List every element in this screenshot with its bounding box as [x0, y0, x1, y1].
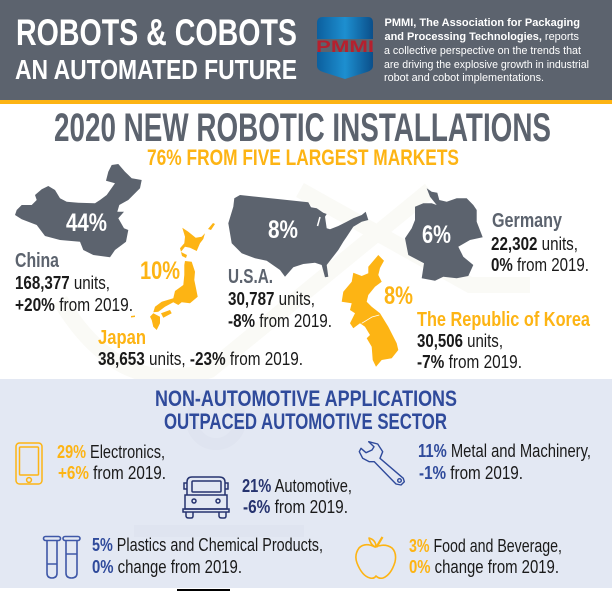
panel: Germany: Germany [492, 210, 563, 232]
automotive: 21% Automotive, [242, 476, 352, 496]
panel: Germany: 0% from 2019. [491, 255, 589, 275]
map: Korea [342, 255, 398, 367]
intro text [384, 17, 589, 84]
panel: China [15, 164, 142, 315]
background gear watermark [60, 190, 530, 377]
panel: Japan: Japan [98, 327, 146, 349]
plastics and chemicals: 5% Plastics and Chemical Products, [92, 535, 323, 555]
panel: Germany [405, 188, 589, 281]
intro text: are driving the explosive growth in industrial [384, 59, 589, 71]
electronics [16, 442, 166, 484]
panel: China: 168,377 units, [15, 273, 110, 293]
panel: Germany: 22,302 units, [491, 234, 578, 254]
intro text: robot and cobot implementations. [384, 72, 544, 84]
metal and machinery: -1% from 2019. [419, 463, 523, 483]
panel: Republic of Korea [342, 255, 591, 372]
metal and machinery [359, 441, 591, 485]
panel: China: +20% from 2019. [15, 295, 133, 315]
map: China [15, 164, 142, 257]
food and beverage: 3% Food and Beverage, [409, 536, 562, 556]
electronics: 29% Electronics, [57, 442, 165, 462]
panel: U.S.A.: 30,787 units, [228, 289, 315, 309]
panel: Japan: 10% [140, 257, 180, 285]
panel: Japan [98, 223, 303, 369]
title [15, 12, 297, 85]
panel: U.S.A.: U.S.A. [228, 266, 273, 288]
panel: U.S.A.: 8% [268, 216, 298, 244]
panel: China: China [15, 250, 60, 272]
heading: new robotic installations [54, 106, 551, 170]
map: U.S.A. [228, 195, 368, 277]
icon: PMMI logo [316, 17, 374, 79]
heading: OUTPACED AUTOMOTIVE SECTOR [164, 409, 447, 434]
panel: Republic of Korea: -7% from 2019. [417, 352, 522, 372]
food and beverage [356, 536, 562, 578]
panel: non-automotive applications [0, 379, 612, 591]
header band [0, 0, 612, 104]
plastics and chemicals [44, 535, 323, 578]
icon: PMMI logo: PMMI [316, 37, 374, 56]
icon: apple [356, 537, 396, 578]
panel: China: 44% [66, 209, 107, 237]
panel: U.S.A.: -8% from 2019. [228, 311, 332, 331]
panel: U.S.A. [228, 195, 368, 331]
panel: Republic of Korea: 30,506 units, [417, 331, 503, 351]
icon: test tubes [44, 536, 80, 578]
icon: smartphone [16, 443, 42, 484]
map: Germany [405, 188, 483, 281]
icon: truck [183, 477, 229, 518]
panel: Republic of Korea: 8% [384, 282, 413, 310]
plastics and chemicals: 0% change from 2019. [92, 557, 242, 577]
intro text: and Processing Technologies, reports [384, 31, 579, 43]
map: Japan [131, 223, 215, 330]
heading [155, 386, 457, 434]
heading: NON-AUTOMOTIVE APPLICATIONS [155, 386, 457, 411]
intro text: PMMI, The Association for Packaging [384, 17, 580, 29]
panel: Japan: 38,653 units, -23% from 2019. [98, 349, 303, 369]
icon: wrench [359, 442, 404, 485]
electronics: +6% from 2019. [58, 463, 166, 483]
title: ROBOTS & COBOTS [16, 12, 297, 53]
food and beverage: 0% change from 2019. [409, 557, 559, 577]
intro text: a collective perspective on the trends that [384, 45, 581, 57]
automotive: -6% from 2019. [243, 497, 348, 517]
automotive [183, 476, 352, 518]
subheading: 76% FROM FIVE LARGEST MARKETS [147, 145, 459, 170]
panel: Germany: 6% [422, 221, 451, 249]
title: AN AUTOMATED FUTURE [15, 54, 297, 85]
